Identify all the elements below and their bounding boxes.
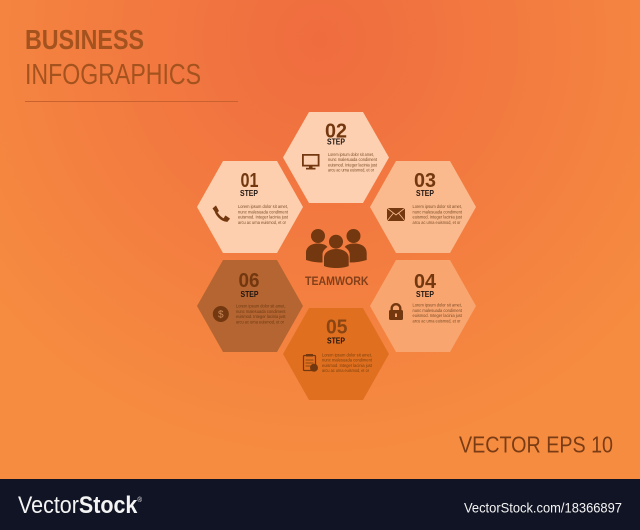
icon: phone <box>213 206 230 222</box>
panel: step 02: STEP <box>327 138 345 146</box>
panel: step 01: 01 <box>240 169 258 192</box>
panel: step 02: euismod. Integer lacinia just <box>328 162 378 168</box>
panel: step 05 <box>283 308 389 400</box>
icon: padlock <box>389 304 403 320</box>
panel: step 04: Lorem ipsum dolor sit amet, <box>412 302 462 308</box>
panel: step 02 <box>283 112 389 203</box>
panel: step 05: Lorem ipsum dolor sit amet, <box>322 352 372 358</box>
icon: dollar coin: $ <box>218 310 224 320</box>
panel: step 02: nunc malesuada condiment <box>328 157 378 162</box>
panel: step 05: 05 <box>326 316 348 338</box>
panel: step 06: euismod. Integer lacinia just <box>236 314 286 319</box>
panel: step 03: STEP <box>416 189 434 198</box>
icon: envelope <box>387 208 405 221</box>
panel: step 02: arcu ac urna euismod, et or <box>328 168 374 172</box>
panel: step 06: nunc malesuada condiment <box>236 309 286 314</box>
title: INFOGRAPHICS <box>25 59 201 91</box>
footer url: VectorStock.com/18366897 <box>464 500 622 516</box>
panel: step 06: STEP <box>240 290 258 299</box>
panel: step 01: STEP <box>240 189 258 198</box>
panel: step 06 <box>197 260 303 352</box>
panel: step 02: 02 <box>325 120 347 142</box>
panel: step 03: euismod. Integer lacinia just <box>412 215 463 220</box>
icon: team of three people <box>306 229 367 268</box>
title <box>25 24 238 102</box>
panel: step 03: 03 <box>414 169 436 192</box>
panel: step 05: STEP <box>327 336 345 346</box>
panel: step 06: arcu ac urna euismod, et or <box>236 319 284 324</box>
teamwork label: TEAMWORK <box>305 274 369 288</box>
icon: monitor <box>302 154 320 170</box>
panel: step 04: euismod. Integer lacinia just <box>412 313 463 318</box>
panel: step 03: Lorem ipsum dolor sit amet, <box>412 204 462 209</box>
panel: step 01 <box>197 161 303 253</box>
panel: step 04: 04 <box>414 270 437 293</box>
panel: step 03 <box>370 161 476 253</box>
panel: step 01: Lorem ipsum dolor sit amet, <box>238 204 288 209</box>
panel: step 04 <box>370 260 476 352</box>
panel: step 06: 06 <box>238 269 260 292</box>
panel: step 02: Lorem ipsum dolor sit amet, <box>328 152 374 157</box>
panel: step 04: STEP <box>416 290 434 299</box>
panel: step 05: arcu ac urna euismod, et or <box>322 368 369 373</box>
footer logo: ® <box>137 496 143 504</box>
panel: step 05: euismod. Integer lacinia just <box>322 363 373 368</box>
icon: clipboard with coin <box>304 354 318 372</box>
vector eps caption: VECTOR EPS 10 <box>459 432 613 458</box>
footer bar <box>0 479 640 530</box>
panel: step 01: arcu ac urna euismod, et or <box>238 220 286 225</box>
panel: step 06: Lorem ipsum dolor sit amet, <box>236 304 286 308</box>
panel: step 01: euismod. Integer lacinia just <box>238 215 289 220</box>
title: BUSINESS <box>25 24 144 55</box>
panel: step 01: nunc malesuada condiment <box>238 209 289 214</box>
panel: step 03: arcu ac urna euismod, et or <box>412 220 461 225</box>
panel: step 03: nunc malesuada condiment <box>412 209 463 214</box>
panel: step 04: nunc malesuada condiment <box>412 308 463 313</box>
footer logo: VectorStock <box>18 492 144 519</box>
panel: step 05: nunc malesuada condiment <box>322 358 373 362</box>
panel: step 04: arcu ac urna euismod, et or <box>412 318 461 323</box>
